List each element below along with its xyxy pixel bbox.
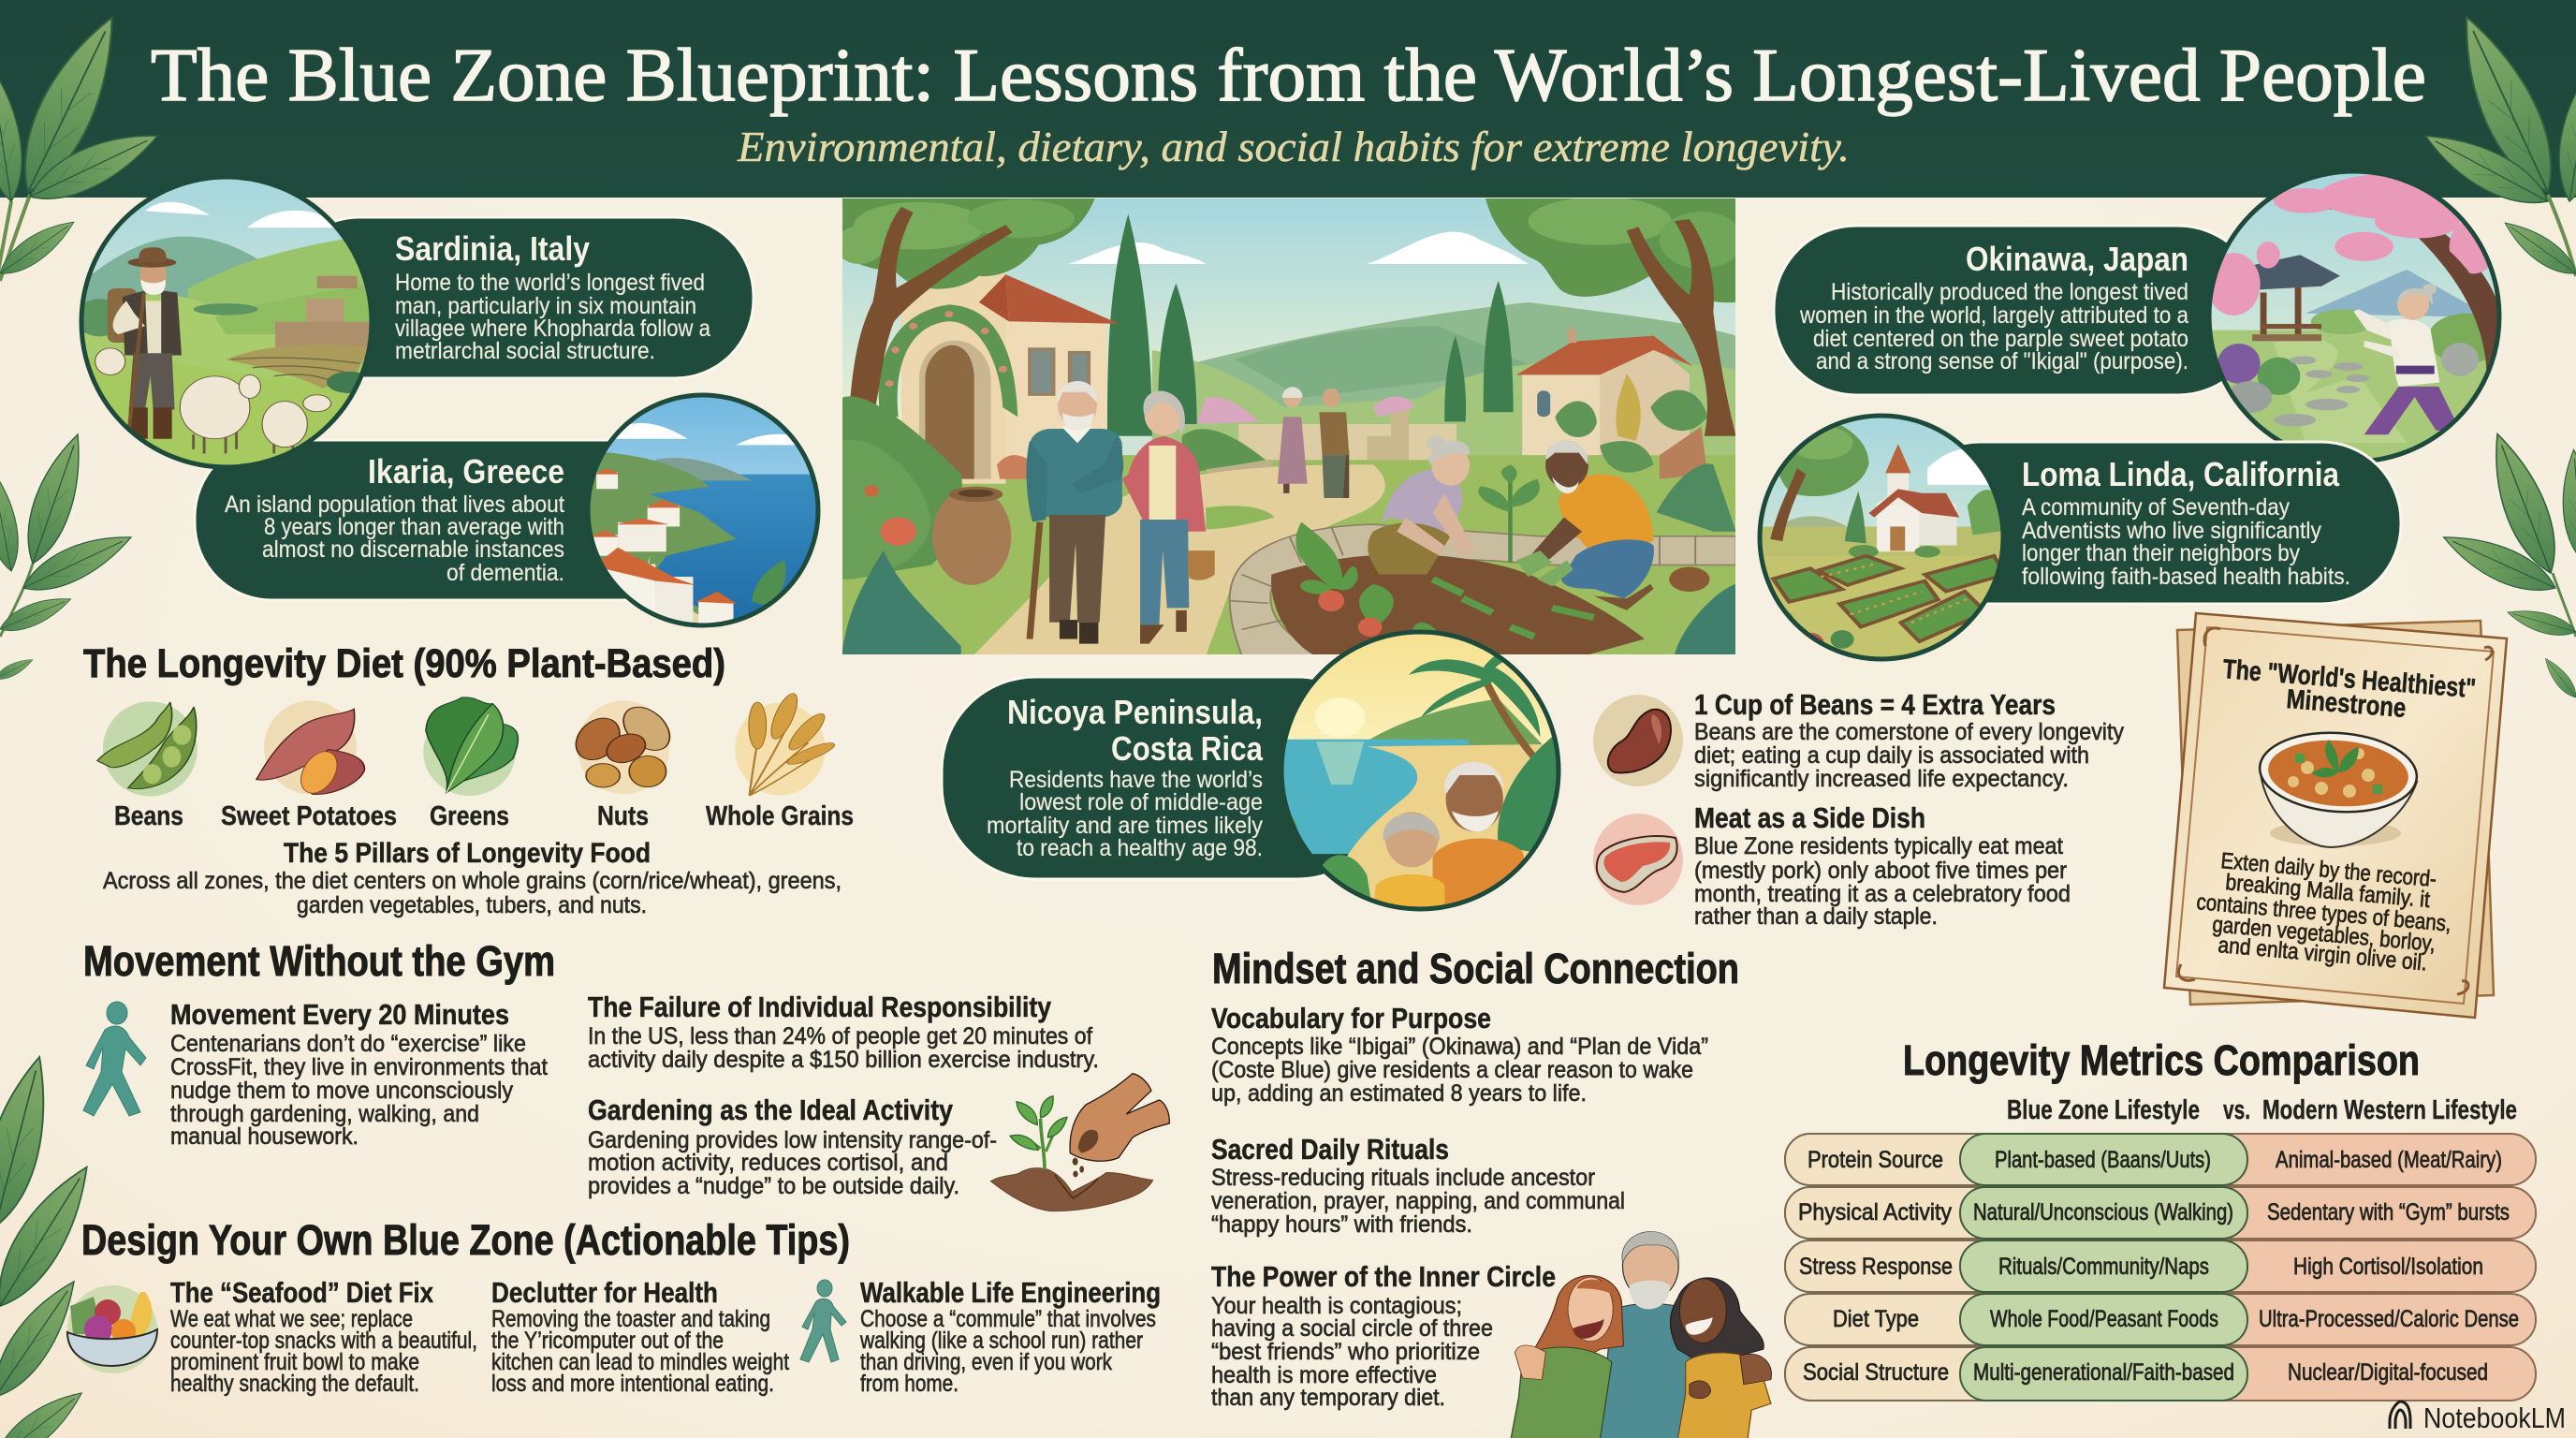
- text block: Movement Every 20 Minutes: nudge them to move unconsciously: [170, 1078, 513, 1104]
- text block: Movement Every 20 Minutes: Movement Every 20 Minutes: [170, 998, 509, 1031]
- text block: The Power of the Inner Circle: The Power of the Inner Circle: [1211, 1260, 1556, 1293]
- recipe title: [2221, 654, 2477, 724]
- food labels: Beans: [114, 801, 183, 831]
- text block: Vocabulary for Purpose: Concepts like “Ibigai” (Okinawa) and “Plan de Vida”: [1211, 1034, 1708, 1060]
- Sardinia body text: metrlarchal social structure.: [395, 338, 655, 364]
- text block: Walkable Life Engineering: than driving, even if you work: [860, 1349, 1112, 1375]
- panel: Okinawa, Japan: [1774, 171, 2503, 464]
- text block: The Power of the Inner Circle: health is more effective: [1211, 1362, 1437, 1388]
- icon: beans: [97, 701, 198, 797]
- panel: Sardinia, Italy: [75, 175, 754, 468]
- text block: 5 pillars: garden vegetables, tubers, and nuts.: [297, 892, 647, 918]
- text block: Walkable Life Engineering: from home.: [860, 1371, 959, 1397]
- left top leaf sprig: [0, 6, 166, 283]
- food labels: Nuts: [597, 801, 649, 831]
- heading: Design Your Own Blue Zone: Design Your Own Blue Zone (Actionable Tips): [81, 1216, 850, 1264]
- text block: 5 pillars: Across all zones, the diet centers on whole grains (corn/rice/wheat), greens,: [103, 868, 842, 894]
- row: physical activity: Physical Activity: [1798, 1199, 1952, 1225]
- icon: steak: [1593, 814, 1683, 905]
- text block: Seafood diet fix: prominent fruit bowl to make: [170, 1349, 419, 1375]
- header banner: [0, 0, 2576, 198]
- row: social structure: Multi-generational/Faith-based: [1973, 1359, 2234, 1386]
- panel: Ikaria, Greece: [195, 389, 822, 631]
- Ikaria body text: 8 years longer than average with: [264, 514, 564, 540]
- text block: 1 Cup of Beans: 1 Cup of Beans = 4 Extra Years: [1694, 688, 2056, 721]
- row: stress response: [1785, 1240, 2536, 1292]
- text block: Seafood diet fix: The “Seafood” Diet Fix: [170, 1276, 434, 1309]
- row: physical activity: Natural/Unconscious (Walking): [1973, 1199, 2233, 1225]
- text block: Meat as a Side Dish: Blue Zone residents typically eat meat: [1694, 833, 2063, 859]
- subtitle: Environmental, dietary, and social habits for extreme longevity.: [737, 124, 1850, 170]
- Ikaria body text: [225, 492, 564, 586]
- Nicoya body text: to reach a healthy age 98.: [1017, 835, 1263, 861]
- Nicoya body text: [987, 767, 1263, 861]
- text block: 5 pillars: [103, 838, 842, 918]
- Okinawa body text: diet centered on the parple sweet potato: [1813, 326, 2188, 352]
- heading: Mindset and Social Connection: Mindset and Social Connection: [1212, 945, 1739, 992]
- row: social structure: Social Structure: [1803, 1359, 1949, 1386]
- panel: minestrone recipe card: [2164, 613, 2507, 1018]
- Loma Linda body text: A community of Seventh-day: [2022, 494, 2290, 521]
- icon: walking person: [83, 1002, 146, 1116]
- row: stress response: Stress Response: [1799, 1254, 1953, 1280]
- table column headers: vs.: [2223, 1095, 2250, 1125]
- right middle leaf sprig: [2437, 427, 2576, 702]
- icon: nuts: [569, 700, 679, 794]
- text block: Meat as a Side Dish: rather than a daily staple.: [1694, 903, 1938, 930]
- recipe description: garden vegetables, borloy,: [2211, 912, 2437, 957]
- text block: Sacred Daily Rituals: “happy hours” with friends.: [1211, 1211, 1472, 1238]
- text block: 1 Cup of Beans: significantly increased life expectancy.: [1694, 766, 2069, 792]
- text block: Vocabulary for Purpose: Vocabulary for Purpose: [1211, 1002, 1491, 1034]
- text block: Sacred Daily Rituals: Sacred Daily Rituals: [1211, 1133, 1449, 1166]
- row: diet type: Diet Type: [1833, 1306, 1919, 1332]
- Sardinia body text: [395, 270, 710, 364]
- text block: Failure of Individual Responsibility: In the US, less than 24% of people get 20 minutes of: [588, 1023, 1092, 1049]
- right tree foliage and trunk: [1486, 198, 1743, 436]
- table column headers: [2007, 1095, 2517, 1125]
- Loma Linda body text: longer than their neighbors by: [2022, 540, 2300, 566]
- Loma Linda body text: following faith-based health habits.: [2022, 564, 2350, 590]
- Sardinia body text: man, particularly in six mountain: [395, 293, 696, 319]
- text block: Seafood diet fix: [170, 1276, 477, 1397]
- text block: 1 Cup of Beans: diet; eating a cup daily is associated with: [1694, 742, 2089, 769]
- Okinawa body text: women in the world, largely attributed to a: [1799, 302, 2188, 329]
- central illustration: village garden scene: [836, 198, 1743, 655]
- food labels: Sweet Potatoes: [221, 801, 397, 831]
- title: The Blue Zone Blueprint: Lessons from the World’s Longest-Lived People: [151, 35, 2426, 117]
- icon: kidney bean: [1593, 695, 1683, 786]
- icon: whole grains: [735, 692, 839, 796]
- recipe description: contains three types of beans,: [2195, 889, 2452, 937]
- recipe title: Minestrone: [2285, 684, 2408, 724]
- illustration: Loma Linda church and gardens: [1757, 414, 2007, 668]
- text block: Declutter for Health: the Y’ricomputer out of the: [491, 1328, 724, 1354]
- left tree foliage and trunk: [842, 198, 1095, 404]
- text block: The Power of the Inner Circle: than any temporary diet.: [1211, 1385, 1445, 1411]
- recipe description: and enlta virgin olive oil.: [2217, 932, 2428, 976]
- row: protein source: Animal-based (Meat/Rairy): [2276, 1147, 2502, 1173]
- text block: Walkable Life Engineering: [859, 1276, 1161, 1397]
- text block: Movement Every 20 Minutes: CrossFit, they live in environments that: [170, 1054, 548, 1080]
- text block: Movement Every 20 Minutes: through gardening, walking, and: [170, 1101, 479, 1127]
- text block: 1 Cup of Beans: Beans are the comerstone of every longevity: [1694, 719, 2124, 745]
- right top leaf sprig: [2417, 7, 2576, 284]
- row: protein source: [1785, 1134, 2536, 1185]
- left middle leaf sprig: [0, 428, 138, 683]
- Sardinia body text: villagee where Khopharda follow a: [395, 315, 710, 342]
- text block: Movement Every 20 Minutes: manual housework.: [170, 1123, 359, 1150]
- text block: Failure of Individual Responsibility: The Failure of Individual Responsibility: [588, 990, 1052, 1023]
- icon: soup bowl: [2257, 727, 2420, 847]
- Okinawa heading: Okinawa, Japan: [1966, 240, 2188, 278]
- text block: Vocabulary for Purpose: (Coste Blue) give residents a clear reason to wake: [1211, 1057, 1693, 1083]
- illustration: Ikaria coast: [586, 389, 822, 631]
- text block: Gardening as the Ideal Activity: Gardening as the Ideal Activity: [588, 1093, 954, 1126]
- text block: Movement Every 20 Minutes: [170, 998, 548, 1150]
- text block: The Power of the Inner Circle: [1211, 1260, 1556, 1411]
- text block: Sacred Daily Rituals: [1211, 1133, 1625, 1238]
- row: protein source: Protein Source: [1808, 1147, 1943, 1173]
- Loma Linda body text: Adventists who live significantly: [2022, 518, 2321, 544]
- text block: Meat as a Side Dish: (mestly pork) only aboot five times per: [1694, 858, 2067, 884]
- recipe title: The "World's Healthiest": [2221, 654, 2477, 704]
- row: physical activity: [1785, 1187, 2536, 1239]
- icon: walking person small: [800, 1280, 846, 1362]
- recipe description: [2195, 848, 2452, 976]
- Okinawa body text: Historically produced the longest tived: [1831, 279, 2188, 305]
- row: physical activity: Sedentary with “Gym” bursts: [2267, 1199, 2510, 1225]
- Loma Linda heading: Loma Linda, California: [2022, 455, 2340, 493]
- text block: 5 pillars: The 5 Pillars of Longevity Food: [284, 838, 651, 869]
- Nicoya body text: Residents have the world’s: [1009, 767, 1263, 793]
- food labels: Greens: [430, 801, 509, 831]
- row: diet type: Whole Food/Peasant Foods: [1990, 1306, 2218, 1332]
- Okinawa body text: and a strong sense of "Ikigal" (purpose).: [1816, 348, 2188, 374]
- Sardinia heading: Sardinia, Italy: [395, 229, 590, 268]
- text block: Seafood diet fix: counter-top snacks with a beautiful,: [170, 1328, 477, 1354]
- Loma Linda body text: [2022, 494, 2350, 590]
- recipe description: breaking Malla family. it: [2224, 870, 2431, 913]
- Nicoya body text: lowest role of middle-age: [1019, 789, 1263, 815]
- text block: Seafood diet fix: healthy snacking the default.: [170, 1371, 419, 1397]
- row: stress response: High Cortisol/Isolation: [2293, 1254, 2483, 1280]
- illustration: Sardinia shepherd: [75, 175, 376, 468]
- heading: Movement Without the Gym: Movement Without the Gym: [83, 937, 555, 985]
- panel: Nicoya Peninsula, Costa Rica: [942, 627, 1564, 914]
- illustration: Okinawa tai chi: [2204, 171, 2503, 464]
- left bottom leaf sprig: [0, 1050, 105, 1438]
- text block: Seafood diet fix: We eat what we see; replace: [170, 1306, 413, 1332]
- text block: Meat as a Side Dish: Meat as a Side Dish: [1694, 801, 1925, 834]
- Sardinia body text: Home to the world’s longest fived: [395, 270, 705, 296]
- food labels: Whole Grains: [706, 801, 854, 831]
- text block: Failure of Individual Responsibility: activity daily despite a $150 billion exercise industry.: [588, 1047, 1099, 1073]
- row: stress response: Rituals/Community/Naps: [1998, 1254, 2209, 1280]
- text block: Declutter for Health: loss and more intentional eating.: [491, 1371, 774, 1397]
- text block: Walkable Life Engineering: Walkable Life Engineering: [860, 1276, 1161, 1309]
- text block: Meat as a Side Dish: [1694, 801, 2071, 930]
- row: social structure: Nuclear/Digital-focused: [2288, 1359, 2488, 1386]
- text block: Declutter for Health: kitchen can lead to mindles weight: [491, 1349, 789, 1375]
- Okinawa body text: [1799, 279, 2188, 374]
- text block: Movement Every 20 Minutes: Centenarians don’t do “exercise” like: [170, 1031, 526, 1057]
- Ikaria body text: almost no discernable instances: [262, 536, 564, 563]
- Nicoya heading: [1007, 693, 1264, 768]
- row: diet type: [1785, 1294, 2536, 1345]
- text block: Walkable Life Engineering: Choose a “commule” that involves: [860, 1306, 1156, 1332]
- text block: Failure of Individual Responsibility: [588, 990, 1099, 1073]
- Ikaria body text: of dementia.: [446, 560, 564, 586]
- text block: Vocabulary for Purpose: [1211, 1002, 1708, 1107]
- heading: The Longevity Diet: The Longevity Diet (90% Plant-Based): [83, 641, 725, 686]
- row: diet type: Ultra-Processed/Caloric Dense: [2259, 1306, 2519, 1332]
- text block: The Power of the Inner Circle: having a social circle of three: [1211, 1315, 1493, 1342]
- recipe description: Exten daily by the record-: [2219, 848, 2437, 892]
- text block: 1 Cup of Beans: [1694, 688, 2124, 792]
- text block: Gardening as the Ideal Activity: [588, 1093, 997, 1199]
- illustration: Nicoya beach couple: [1278, 627, 1564, 914]
- food labels: [114, 801, 854, 831]
- heading: Longevity Metrics Comparison: Longevity Metrics Comparison: [1903, 1036, 2420, 1084]
- row: social structure: [1785, 1347, 2536, 1401]
- illustration: three friends laughing: [1511, 1231, 1772, 1438]
- text block: Gardening as the Ideal Activity: provides a “nudge” to be outside daily.: [588, 1173, 959, 1199]
- Ikaria heading: Ikaria, Greece: [368, 452, 564, 491]
- icon: hands planting seedling: [990, 1074, 1169, 1211]
- text block: Gardening as the Ideal Activity: motion activity, reduces cortisol, and: [588, 1150, 948, 1176]
- text block: Sacred Daily Rituals: Stress-reducing rituals include ancestor: [1211, 1165, 1595, 1191]
- text block: Declutter for Health: [491, 1276, 789, 1397]
- Nicoya heading: Nicoya Peninsula,: [1007, 693, 1263, 731]
- text block: Declutter for Health: Removing the toaster and taking: [491, 1306, 770, 1332]
- icon: fruit bowl: [67, 1285, 157, 1373]
- Ikaria body text: An island population that lives about: [225, 492, 564, 518]
- panel: Loma Linda, California: [1757, 414, 2401, 668]
- text block: The Power of the Inner Circle: Your health is contagious;: [1211, 1293, 1462, 1319]
- text block: Gardening as the Ideal Activity: Gardening provides low intensity range-of-: [588, 1127, 997, 1153]
- icon: sweet potatoes: [256, 700, 364, 796]
- comparison table: [1785, 1134, 2536, 1401]
- text block: Declutter for Health: Declutter for Health: [491, 1276, 718, 1309]
- row: protein source: Plant-based (Baans/Uuts): [1995, 1147, 2211, 1173]
- text block: Vocabulary for Purpose: up, adding an estimated 8 years to life.: [1211, 1080, 1587, 1107]
- text block: Meat as a Side Dish: month, treating it as a celebratory food: [1694, 881, 2071, 907]
- Nicoya heading: Costa Rica: [1111, 729, 1264, 768]
- Nicoya body text: mortality and are times likely: [987, 813, 1263, 839]
- text block: Walkable Life Engineering: walking (like a school run) rather: [859, 1328, 1143, 1354]
- text block: Sacred Daily Rituals: veneration, prayer, napping, and communal: [1211, 1188, 1625, 1214]
- text block: The Power of the Inner Circle: “best friends” who prioritize: [1211, 1339, 1480, 1365]
- icon: greens: [423, 697, 518, 796]
- table column headers: Blue Zone Lifestyle: [2007, 1095, 2200, 1125]
